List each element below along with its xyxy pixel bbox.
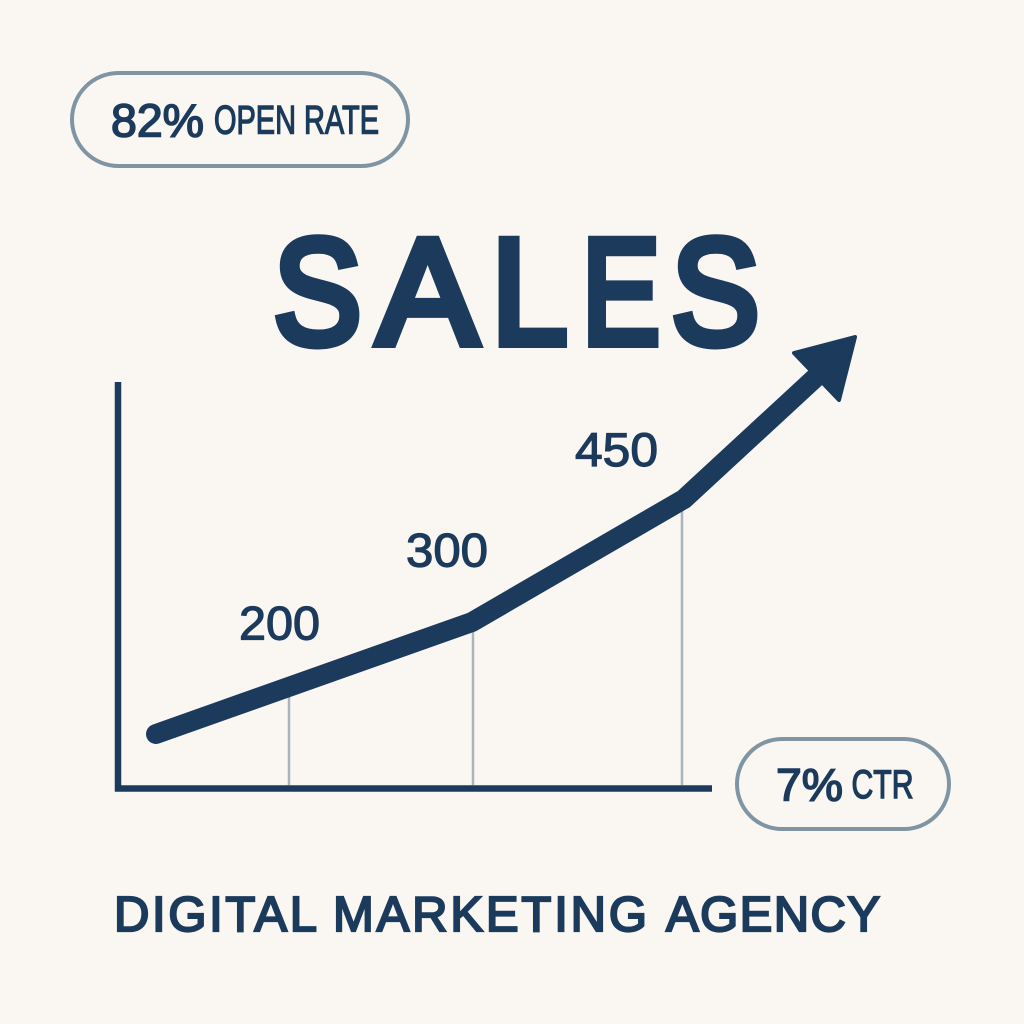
badge: 7% CTR: CTR xyxy=(852,763,914,807)
axes xyxy=(118,382,712,788)
badge: 7% CTR xyxy=(737,739,949,829)
title: S xyxy=(274,208,362,376)
label 450: 450 xyxy=(575,423,658,476)
badge: 82% open rate: OPEN RATE xyxy=(214,98,379,142)
footer text: MARKETING xyxy=(333,888,647,942)
badge: 82% open rate: 82% xyxy=(111,94,204,146)
label 300: 300 xyxy=(406,524,488,576)
line chart xyxy=(118,337,855,788)
footer text: DIGITAL xyxy=(114,888,317,942)
title: A xyxy=(378,208,478,376)
trend line xyxy=(156,378,815,734)
title: E xyxy=(582,208,660,376)
title: S xyxy=(672,208,760,376)
badge: 7% CTR: 7% xyxy=(776,760,843,810)
icon: arrow head xyxy=(794,337,855,400)
badge: 82% open rate xyxy=(72,73,408,166)
drop lines xyxy=(289,500,682,785)
footer text xyxy=(114,888,880,942)
label 200: 200 xyxy=(239,596,320,650)
footer text: AGENCY xyxy=(666,888,880,942)
title: L xyxy=(492,208,568,376)
